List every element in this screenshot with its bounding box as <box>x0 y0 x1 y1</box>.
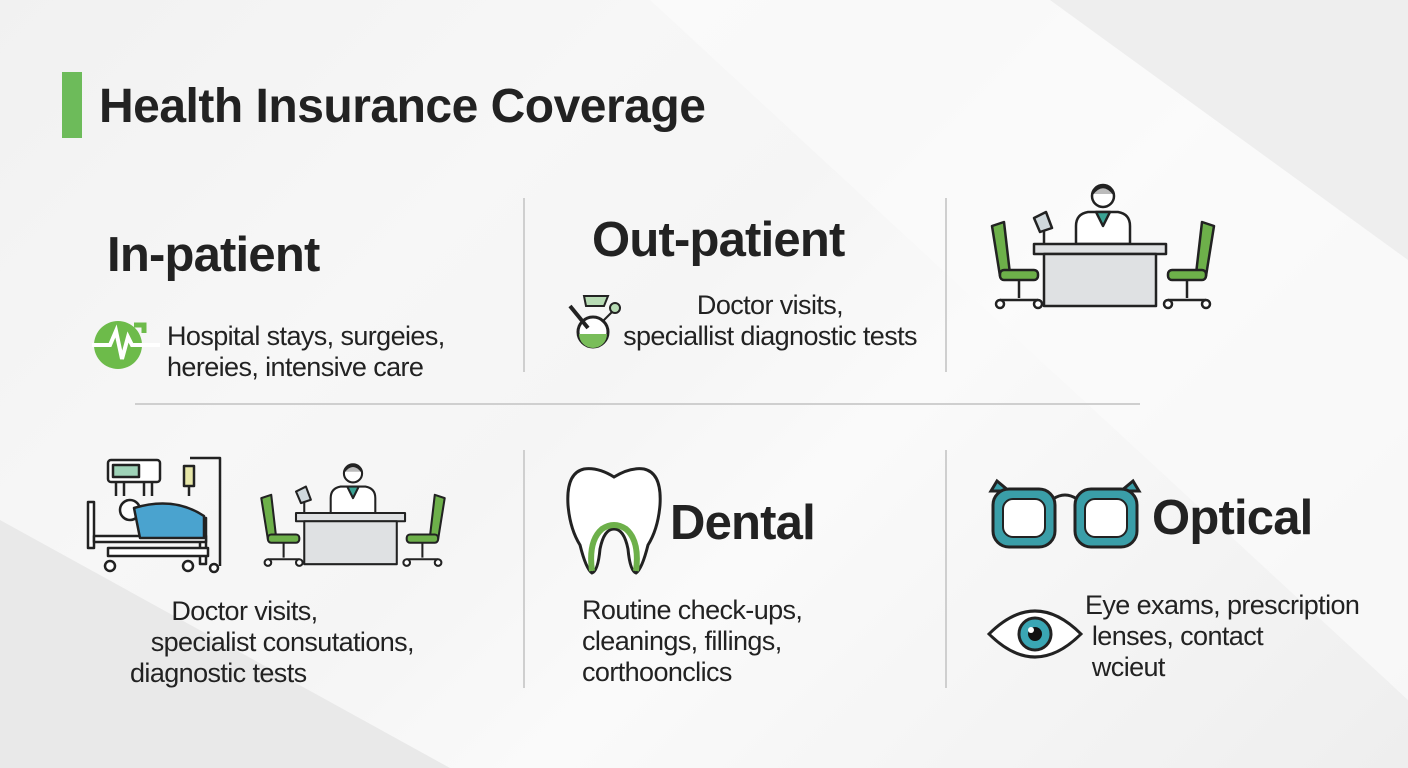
text: optical: wcieut <box>1092 652 1165 682</box>
icon: glasses <box>988 478 1142 548</box>
panel: out-patient <box>568 213 917 351</box>
heading: optical: Optical <box>1152 491 1312 545</box>
text: doctor visits bottom: specialist consutations, <box>151 627 414 657</box>
text: out-patient <box>623 290 917 351</box>
text: out-patient: speciallist diagnostic tests <box>623 321 917 351</box>
icon: tooth <box>566 467 662 575</box>
icon: doctor desk bottom <box>260 463 446 567</box>
icon: doctor desk top <box>990 184 1216 310</box>
text: optical <box>1085 590 1359 682</box>
text: doctor visits bottom <box>130 596 414 688</box>
text: optical: lenses, contact <box>1092 621 1263 651</box>
title: Health Insurance Coverage <box>99 80 705 133</box>
panel: dental <box>566 467 815 687</box>
text: out-patient: Doctor visits, <box>697 290 843 320</box>
icon: eye <box>987 609 1083 659</box>
text: doctor visits bottom: diagnostic tests <box>130 658 306 688</box>
panel: optical <box>987 478 1359 682</box>
heading: in-patient: In-patient <box>107 228 319 282</box>
icon: lab flask <box>568 295 621 348</box>
text: in-patient: Hospital stays, surgeies, hereies, intensive care <box>167 321 445 382</box>
text: doctor visits bottom: Doctor visits, <box>171 596 318 626</box>
heading: out-patient: Out-patient <box>592 213 844 267</box>
icon: heartbeat <box>92 321 160 369</box>
panel: in-patient <box>92 228 445 382</box>
icon: hospital bed <box>86 456 222 574</box>
heading: dental: Dental <box>670 496 815 550</box>
text: dental: Routine check-ups, cleanings, fillings, corthoonclics <box>582 595 802 687</box>
text: optical: Eye exams, prescription <box>1085 590 1359 620</box>
